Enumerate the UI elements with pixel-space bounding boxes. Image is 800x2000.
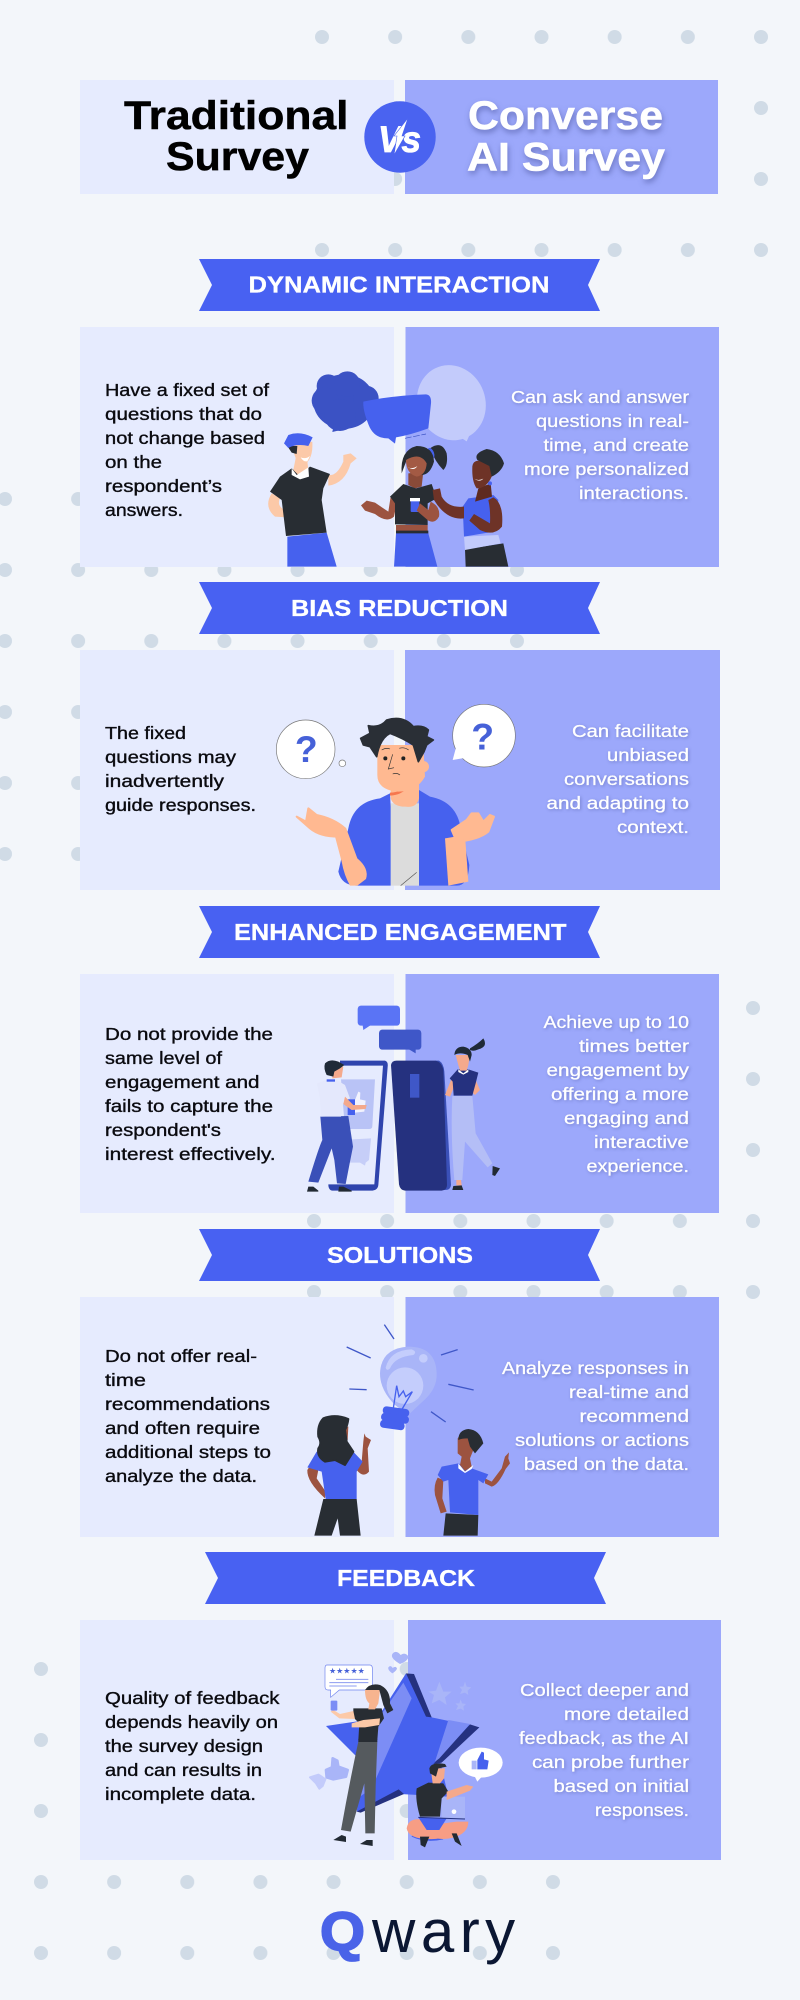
- seated woman: [407, 1763, 473, 1847]
- title text: Traditional Survey: Traditional: [124, 94, 348, 138]
- panel left: solutions traditional: time: [105, 1370, 146, 1390]
- illustration: three people talking with speech bubbles: [268, 355, 508, 567]
- text: solutions AI: solutions or actions: [515, 1430, 689, 1450]
- hearts and decorations: [310, 1652, 471, 1789]
- text: solutions AI: based on the data.: [524, 1454, 689, 1474]
- panel left: solutions traditional: Do not offer real-: [105, 1346, 257, 1366]
- illustration: two people and a light bulb: [307, 1325, 510, 1536]
- panel left: feedback traditional: depends heavily on: [105, 1712, 278, 1732]
- ribbon: solutions: SOLUTIONS: [327, 1242, 473, 1268]
- panel left: bias reduction traditional: The fixed: [105, 723, 186, 743]
- VS badge: Vs: [378, 119, 421, 160]
- text: bias reduction AI: [546, 721, 689, 837]
- text: dynamic interaction AI: [511, 387, 689, 503]
- illustration: two people with a star and ratings: [310, 1652, 503, 1847]
- text: enhanced engagement AI: times better: [579, 1036, 689, 1056]
- text: bias reduction AI: conversations: [564, 769, 689, 789]
- text: solutions AI: Analyze responses in: [502, 1358, 689, 1378]
- panel left: enhanced engagement traditional: respondent's: [105, 1120, 221, 1140]
- star: [326, 1673, 479, 1813]
- text: solutions AI: recommend: [580, 1406, 689, 1426]
- panel left: dynamic interaction traditional: [80, 327, 394, 567]
- thought bubble: [276, 720, 346, 779]
- woman two: [433, 449, 508, 567]
- text: enhanced engagement AI: interactive: [594, 1132, 689, 1152]
- panel right: bias reduction AI: [405, 650, 720, 890]
- panel left: dynamic interaction traditional: questions that do: [105, 404, 262, 424]
- text: dynamic interaction AI: time, and create: [544, 435, 689, 455]
- panel left: feedback traditional: incomplete data.: [105, 1784, 256, 1804]
- panel left: enhanced engagement traditional: same level of: [105, 1048, 222, 1068]
- man: [268, 433, 357, 567]
- text: enhanced engagement AI: offering a more: [551, 1084, 689, 1104]
- speech bubble blue: [363, 394, 431, 444]
- speech bubble cloud: [312, 371, 379, 432]
- title text: Traditional Survey: Survey: [166, 135, 310, 179]
- panel left: solutions traditional: recommendations: [105, 1394, 270, 1414]
- phone with messages: [328, 1061, 388, 1191]
- chat bubbles: [358, 1006, 421, 1053]
- text: enhanced engagement AI: engagement by: [546, 1060, 689, 1080]
- panel left: solutions traditional: and often require: [105, 1418, 260, 1438]
- woman one: [361, 445, 447, 567]
- panel left: feedback traditional: [80, 1620, 394, 1860]
- thought bubble: ?: [295, 728, 318, 770]
- text: solutions AI: real-time and: [569, 1382, 689, 1402]
- woman: [307, 1416, 371, 1536]
- phone dark: [391, 1061, 451, 1191]
- title text: Converse AI Survey: Converse: [468, 94, 663, 138]
- ribbon: bias reduction: [199, 582, 600, 634]
- light bulb: [347, 1325, 474, 1431]
- text: enhanced engagement AI: Achieve up to 10: [544, 1012, 689, 1032]
- text: feedback AI: Collect deeper and: [520, 1680, 689, 1700]
- review bubble: ★★★★★: [329, 1667, 365, 1676]
- speech bubble: [453, 704, 515, 767]
- panel left: solutions traditional: [80, 1297, 394, 1537]
- standing woman: [331, 1684, 393, 1846]
- panel right: solutions AI: [406, 1297, 719, 1537]
- panel left: bias reduction traditional: questions may: [105, 747, 236, 767]
- text: feedback AI: responses.: [595, 1800, 689, 1820]
- title text: Traditional Survey: [124, 94, 348, 179]
- text: enhanced engagement AI: experience.: [586, 1156, 689, 1176]
- panel left: enhanced engagement traditional: fails to capture the: [105, 1096, 273, 1116]
- panel left: solutions traditional: analyze the data.: [105, 1466, 257, 1486]
- panel left: dynamic interaction traditional: not change based: [105, 428, 265, 448]
- title panel: converse AI survey: [405, 80, 718, 194]
- text: dynamic interaction AI: questions in real-: [536, 411, 689, 431]
- text: feedback AI: feedback, as the AI: [519, 1728, 689, 1748]
- speech bubble: ?: [471, 716, 494, 758]
- text: solutions AI: [502, 1358, 689, 1474]
- panel left: bias reduction traditional: inadvertently: [105, 771, 224, 791]
- text: feedback AI: based on initial: [554, 1776, 689, 1796]
- logo: Qwary: wary: [371, 1898, 521, 1965]
- speech bubble pale: [406, 355, 496, 450]
- text: feedback AI: can probe further: [532, 1752, 689, 1772]
- text: dynamic interaction AI: Can ask and answer: [511, 387, 689, 407]
- ribbon: bias reduction: BIAS REDUCTION: [291, 595, 508, 621]
- man: [435, 1429, 510, 1536]
- illustration: two people with smartphones and chat bubbles: [307, 1006, 500, 1192]
- ribbon: enhanced engagement: ENHANCED ENGAGEMENT: [234, 919, 567, 945]
- panel left: feedback traditional: the survey design: [105, 1736, 263, 1756]
- VS badge: [364, 101, 436, 173]
- panel left: dynamic interaction traditional: respondent’s: [105, 476, 222, 496]
- title text: Converse AI Survey: [467, 94, 666, 180]
- text: bias reduction AI: and adapting to: [546, 793, 689, 813]
- ribbon: solutions: [199, 1229, 600, 1281]
- panel right: feedback AI: [408, 1620, 721, 1860]
- panel left: enhanced engagement traditional: Do not provide the: [105, 1024, 273, 1044]
- man: [297, 718, 494, 886]
- text: feedback AI: [519, 1680, 689, 1820]
- panel left: dynamic interaction traditional: on the: [105, 452, 162, 472]
- man: [307, 1060, 367, 1192]
- panel right: dynamic interaction AI: [406, 327, 719, 567]
- ribbon: dynamic interaction: DYNAMIC INTERACTION: [248, 272, 550, 298]
- panel left: feedback traditional: and can results in: [105, 1760, 262, 1780]
- title text: Converse AI Survey: AI Survey: [467, 136, 666, 180]
- panel right: enhanced engagement AI: [406, 974, 719, 1213]
- text: bias reduction AI: context.: [617, 817, 689, 837]
- text: enhanced engagement AI: [544, 1012, 689, 1176]
- text: dynamic interaction AI: interactions.: [579, 483, 689, 503]
- panel left: bias reduction traditional: [80, 650, 394, 890]
- text: enhanced engagement AI: engaging and: [564, 1108, 689, 1128]
- thumbs-up bubble: [459, 1748, 503, 1782]
- panel left: bias reduction traditional: guide responses.: [105, 795, 256, 815]
- ribbon: feedback: FEEDBACK: [337, 1565, 475, 1591]
- illustration: confused man with question bubbles: [276, 704, 515, 886]
- ribbon: enhanced engagement: [199, 906, 600, 958]
- text: bias reduction AI: unbiased: [607, 745, 689, 765]
- title panel: traditional survey: [80, 80, 394, 194]
- review bubble: [325, 1665, 372, 1697]
- text: dynamic interaction AI: more personalized: [524, 459, 689, 479]
- woman: [445, 1038, 500, 1190]
- logo: Qwary: Q: [320, 1900, 365, 1962]
- panel left: dynamic interaction traditional: answers.: [105, 500, 183, 520]
- panel left: feedback traditional: Quality of feedback: [105, 1688, 280, 1708]
- panel left: enhanced engagement traditional: [80, 974, 394, 1213]
- panel left: enhanced engagement traditional: interest effectively.: [105, 1144, 276, 1164]
- panel left: solutions traditional: additional steps to: [105, 1442, 271, 1462]
- ribbon: feedback: [205, 1552, 606, 1604]
- text: bias reduction AI: Can facilitate: [572, 721, 689, 741]
- ribbon: dynamic interaction: [199, 259, 600, 311]
- panel left: dynamic interaction traditional: Have a fixed set of: [105, 380, 269, 400]
- panel left: enhanced engagement traditional: engagement and: [105, 1072, 260, 1092]
- text: feedback AI: more detailed: [564, 1704, 689, 1724]
